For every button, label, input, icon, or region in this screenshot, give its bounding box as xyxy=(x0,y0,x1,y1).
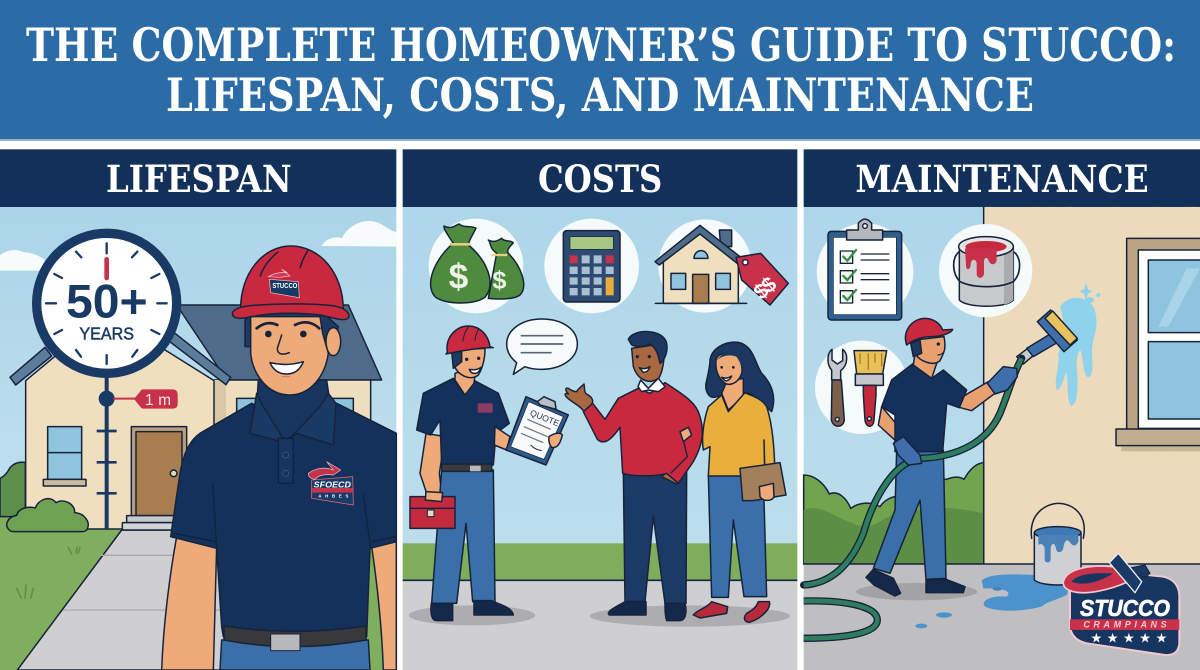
logo: Stucco Champians: STUCCO xyxy=(1080,595,1170,621)
maintenance header bar: MAINTENANCE xyxy=(855,157,1149,201)
stucco wall xyxy=(984,207,1200,564)
trousers xyxy=(873,450,946,579)
water drops xyxy=(915,587,1002,628)
clouds xyxy=(0,221,396,271)
worker shadow xyxy=(856,583,977,600)
clock: 50+ years xyxy=(37,233,177,373)
shadows xyxy=(409,605,535,625)
chest logo: AHBES xyxy=(318,494,348,499)
spray brush xyxy=(1017,310,1077,364)
blue bucket xyxy=(1031,503,1084,585)
woman's trousers xyxy=(708,475,767,597)
house window xyxy=(48,427,82,479)
man's hair xyxy=(628,332,667,363)
cap xyxy=(905,318,953,345)
worker portrait xyxy=(162,246,396,670)
right roof xyxy=(177,305,382,380)
panel: costs xyxy=(403,149,797,670)
main wall xyxy=(26,313,214,529)
bushes xyxy=(804,463,984,564)
toolbox arm xyxy=(420,433,445,493)
icon: calculator xyxy=(544,219,639,313)
grass tufts xyxy=(17,547,80,598)
logo: Stucco Champians: CRAMPIANS xyxy=(1083,620,1167,630)
back bush xyxy=(0,462,25,517)
hard hat xyxy=(241,246,343,310)
logo swoosh xyxy=(1063,566,1128,593)
title line 2: LIFESPAN, COSTS, AND MAINTENANCE xyxy=(166,68,1034,122)
title banner xyxy=(0,0,1200,141)
steps xyxy=(127,516,177,523)
icon: house with price tag xyxy=(655,219,788,313)
chest logo: SFOECD xyxy=(314,479,351,489)
window xyxy=(1116,238,1200,451)
boots xyxy=(431,601,513,621)
neck xyxy=(722,378,743,410)
hand at woman's arm xyxy=(680,427,692,442)
logo: Stucco Champians: ★★★★★ xyxy=(1090,631,1172,646)
red helmet xyxy=(446,326,493,354)
jeans xyxy=(220,640,370,670)
hose xyxy=(804,358,1022,585)
front bush xyxy=(7,499,88,532)
man in red sweater xyxy=(565,332,702,621)
lawn xyxy=(0,517,396,670)
belt xyxy=(224,626,366,647)
measuring pole xyxy=(97,373,178,529)
logo trowel xyxy=(1109,553,1150,593)
clock: 50+ years: 50+ xyxy=(66,276,148,329)
costs header bar xyxy=(403,149,797,207)
clipboard: quote xyxy=(506,397,568,465)
right wing window xyxy=(237,398,353,448)
clock: 50+ years: YEARS xyxy=(79,323,134,343)
icon: checklist clipboard xyxy=(817,219,913,320)
clipboard: quote: QUOTE xyxy=(529,408,561,428)
1 m tag: 1 m xyxy=(145,392,171,409)
shoes xyxy=(693,602,770,622)
lifespan header bar xyxy=(0,149,396,207)
logo: Stucco Champians xyxy=(1063,553,1179,655)
icon: money bags: $ xyxy=(449,258,469,297)
collar xyxy=(638,378,665,392)
neck and head xyxy=(455,367,476,395)
hat logo: STUCCO xyxy=(272,281,298,290)
inner collar xyxy=(257,380,330,442)
face xyxy=(251,317,328,395)
red sweater xyxy=(583,383,702,483)
toolbox xyxy=(410,492,455,528)
neck and head xyxy=(913,353,940,378)
collar xyxy=(250,393,336,445)
sky background xyxy=(0,207,396,540)
brush xyxy=(854,351,887,374)
hair and ears xyxy=(245,310,338,347)
arms xyxy=(162,537,217,670)
contractor with quote xyxy=(410,326,513,621)
door xyxy=(131,427,187,517)
sky background xyxy=(804,207,984,565)
polo xyxy=(417,378,509,465)
head xyxy=(632,343,664,381)
woman xyxy=(693,342,786,622)
gable eaves xyxy=(10,347,52,385)
icon: money bags: $ xyxy=(492,267,506,295)
hand in pocket xyxy=(662,468,682,484)
polo xyxy=(882,363,967,452)
1 m tag xyxy=(134,389,178,409)
right wing wall xyxy=(214,380,371,528)
gloves xyxy=(893,367,1017,465)
polo shirt xyxy=(171,403,396,637)
lawn strip xyxy=(403,543,797,581)
hat logo xyxy=(268,269,299,298)
long hair xyxy=(706,342,774,412)
folder xyxy=(740,463,786,501)
sky background xyxy=(403,207,797,544)
hose worker xyxy=(866,318,995,596)
face xyxy=(716,353,742,384)
spray splash xyxy=(1056,298,1096,406)
raised arm xyxy=(957,382,995,411)
man's shoes xyxy=(608,602,686,621)
water sparkles xyxy=(1079,283,1100,303)
hose coil on ground xyxy=(804,601,877,638)
belt xyxy=(442,464,492,471)
walkway xyxy=(17,530,227,670)
man's trousers xyxy=(623,472,687,603)
boots xyxy=(866,569,965,596)
yellow sweater xyxy=(703,393,775,483)
trousers xyxy=(432,470,495,603)
rear arm xyxy=(878,407,905,442)
panel: maintenance xyxy=(804,149,1200,670)
lifespan header bar: LIFESPAN xyxy=(106,157,292,201)
icon: money bags xyxy=(429,219,524,313)
speech bubble xyxy=(507,319,577,374)
window sill xyxy=(1116,429,1200,446)
wrench xyxy=(828,349,847,380)
forearm to clipboard xyxy=(494,427,510,450)
maintenance header bar xyxy=(804,149,1200,207)
costs header bar: COSTS xyxy=(538,157,662,201)
price tag: $$ xyxy=(749,272,781,305)
raised hand xyxy=(565,384,593,412)
icon: wrench and paintbrush xyxy=(815,341,908,434)
eyebrows, eyes, nose and smile xyxy=(257,322,319,377)
chest logo xyxy=(308,462,353,505)
water puddle xyxy=(982,574,1068,611)
pavement xyxy=(804,564,1200,670)
icon: red paint can xyxy=(939,224,1032,317)
panel: lifespan xyxy=(0,149,396,670)
pavement xyxy=(403,580,797,670)
house xyxy=(10,305,382,530)
